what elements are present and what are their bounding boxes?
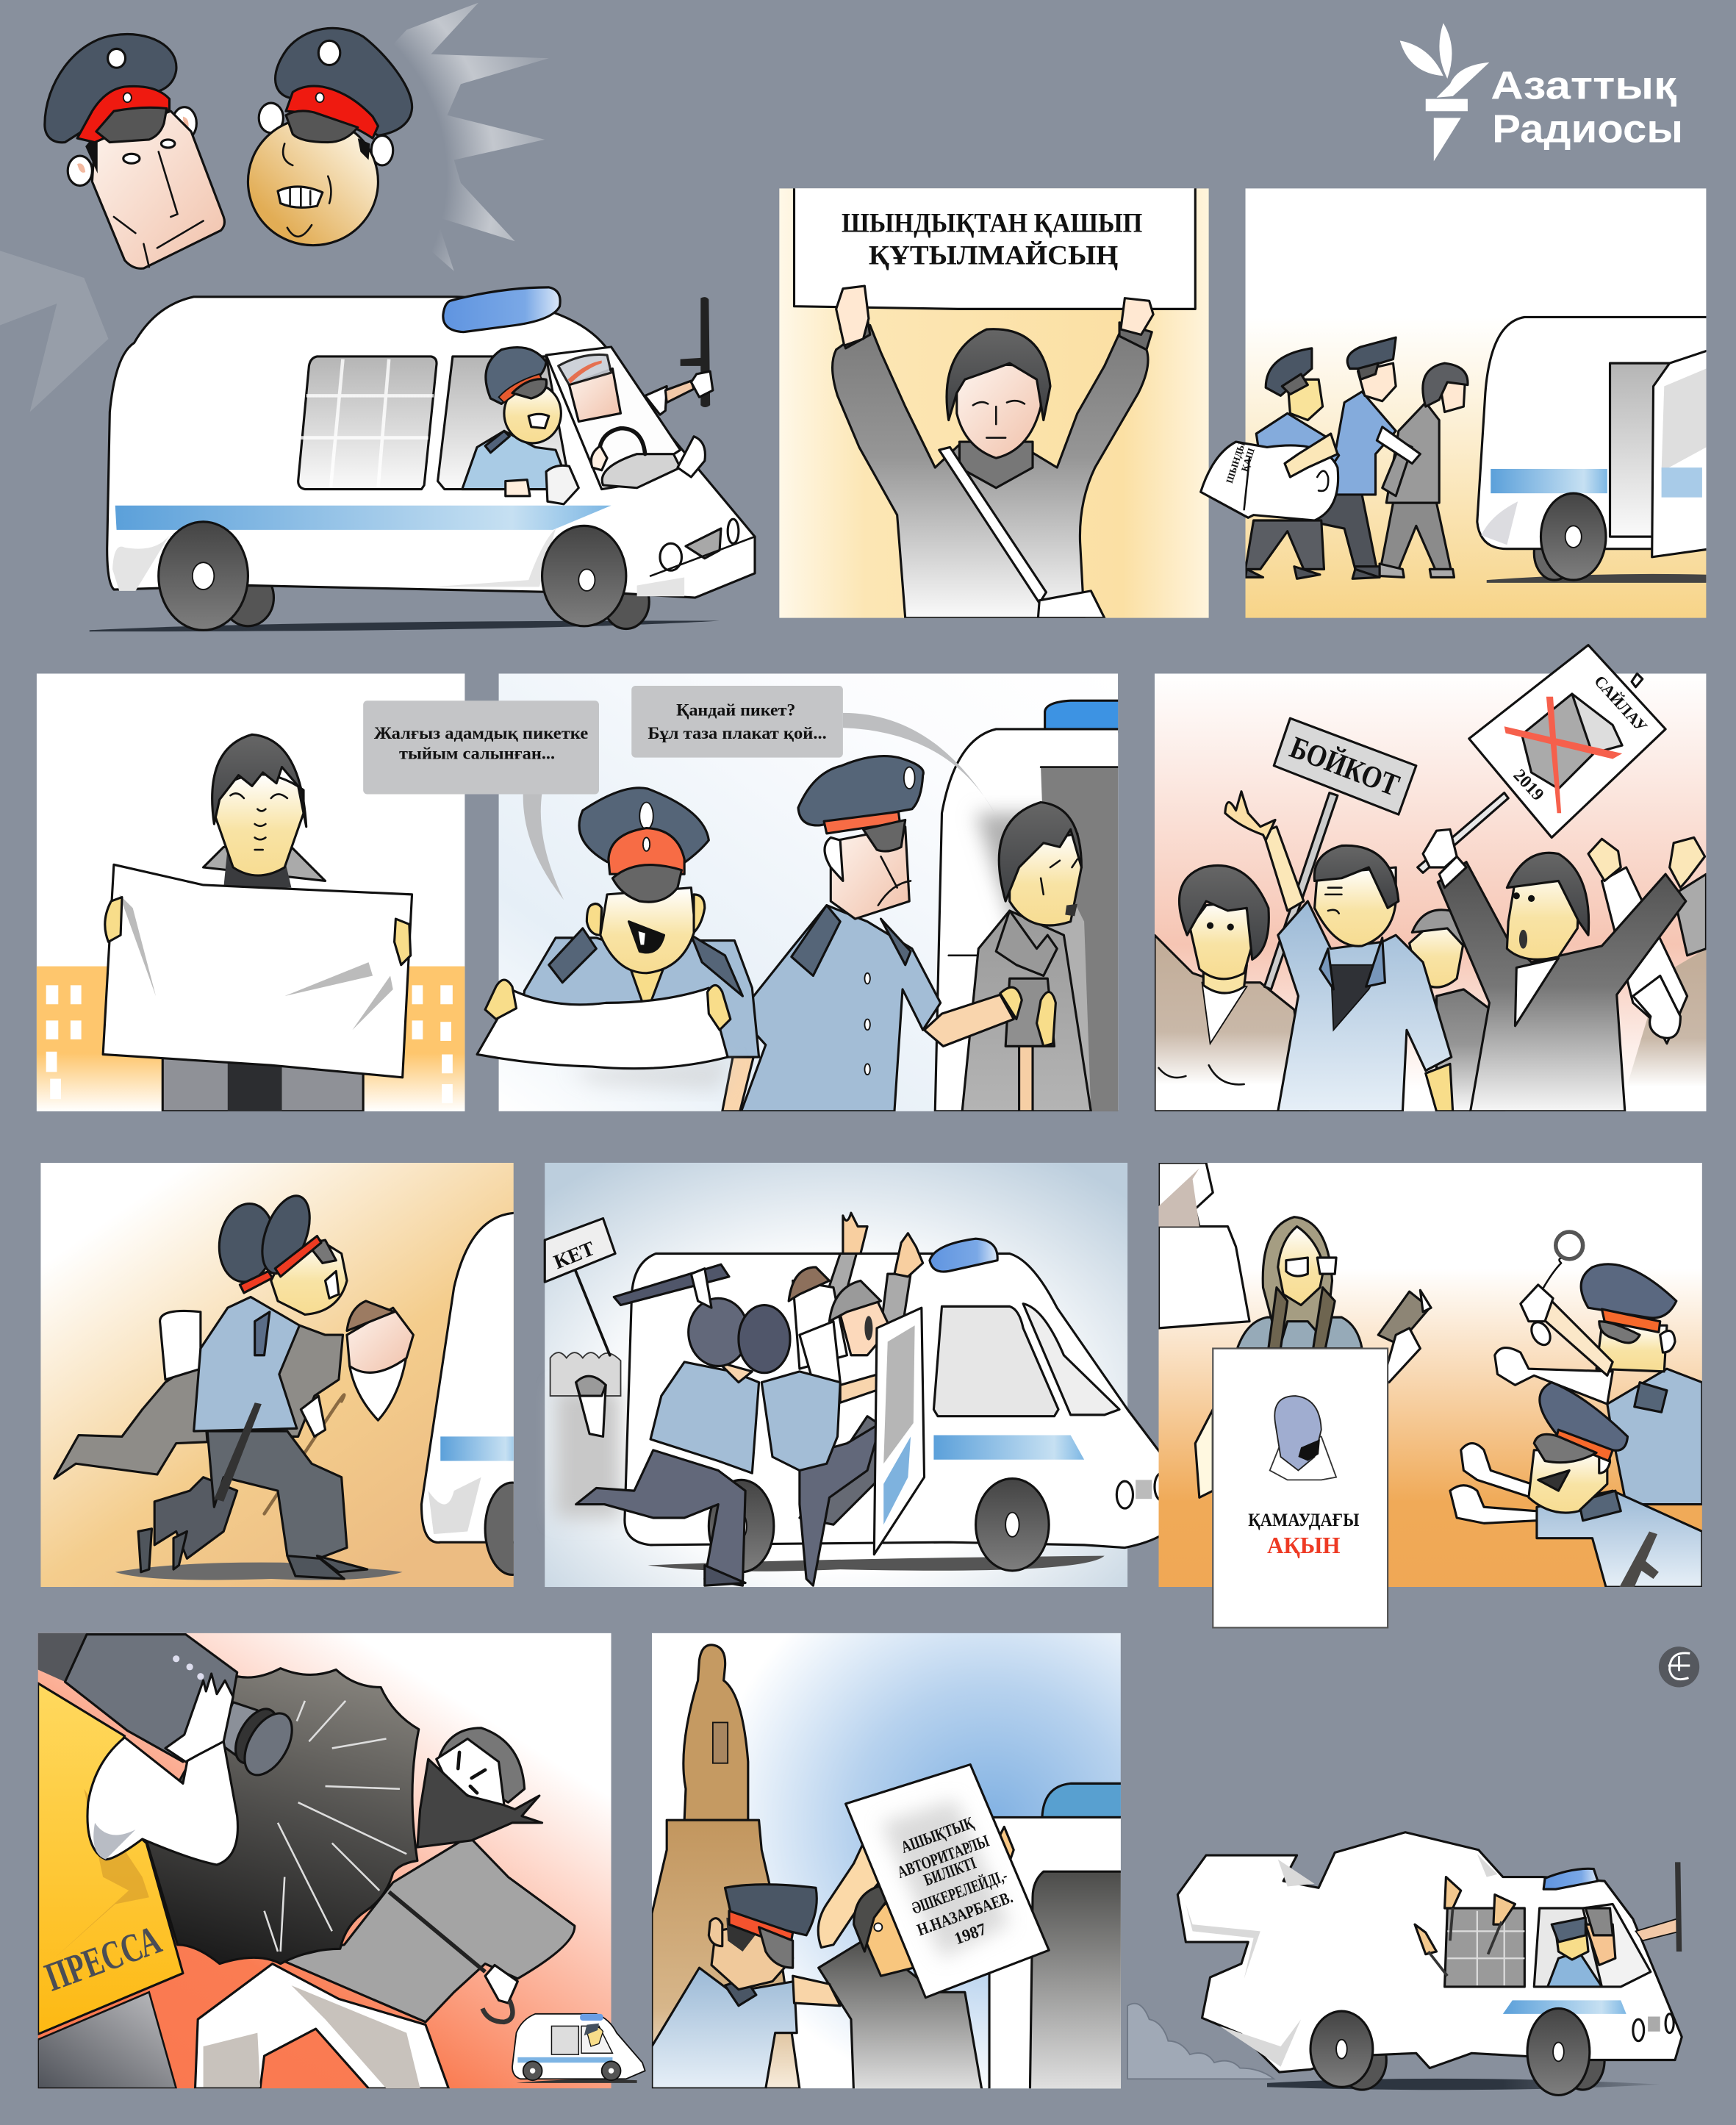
camera [38, 1633, 301, 1783]
van in side view [625, 1239, 1180, 1572]
van with open door [1477, 317, 1721, 583]
exhaust smoke [1127, 2004, 1274, 2079]
roll inscription: ШЫНДЫ [1224, 440, 1247, 484]
press label: ПРЕССА [39, 1917, 167, 2000]
panel: statue and 1987 quote [652, 1633, 1132, 2094]
tall officer [1312, 337, 1420, 577]
head: policeman with round face [248, 28, 412, 246]
round mark [1659, 1646, 1699, 1687]
officer side [652, 1885, 840, 2088]
roll inscription second line: ҚАШ [1239, 447, 1257, 473]
journalist white sleeve [87, 1674, 237, 1865]
ballot box [1522, 694, 1599, 789]
panel: detention at van [545, 1163, 1180, 1587]
man in dark coat [818, 1827, 1014, 2094]
van door [874, 1308, 925, 1555]
rolled banner [1201, 434, 1338, 520]
sign text: БОЙКОТ [1285, 730, 1404, 803]
red cross [1504, 697, 1622, 813]
sign text: top line: ШЫНДЫҚТАН ҚАШЫП [842, 207, 1142, 237]
van behind [989, 1783, 1132, 2094]
walking stick [265, 1395, 344, 1513]
placard creases [119, 895, 393, 1030]
van edge [421, 1213, 539, 1574]
panel: election boycott crowd [1155, 673, 1706, 1111]
hands on placard [105, 897, 411, 965]
bubble left text line 2: тыйым салынған... [399, 744, 555, 762]
fist and election post [1418, 793, 1508, 872]
panel: arrest near van [1246, 188, 1721, 618]
orange buildings [37, 967, 465, 1111]
logo wordmark bottom: Радиосы [1492, 108, 1683, 151]
detained man [1380, 363, 1468, 577]
panel: press camera and umbrella [38, 1633, 611, 2088]
mini police van [512, 2014, 645, 2083]
umbrella [146, 1669, 485, 1972]
book cover: poet in detention [1213, 1349, 1388, 1627]
statue and pedestal [652, 1645, 800, 2088]
speech bubble left [363, 700, 599, 900]
top officer [1495, 1232, 1702, 1505]
quote line 3: БИЛІКТІ [921, 1853, 978, 1889]
short officer [1246, 348, 1339, 569]
masked protester body [196, 1836, 575, 2088]
woman in tan top [1155, 865, 1308, 1111]
officers pushing [576, 1264, 892, 1585]
sign text: КЕТ [550, 1236, 598, 1273]
speech bubble right [631, 686, 994, 813]
officer torso [194, 1297, 326, 1502]
bubble text line 1: Қандай пикет? [676, 700, 795, 719]
panel: protester with sign overhead [779, 179, 1209, 618]
sign: boycott [1274, 718, 1416, 814]
panel: man with blank placard [37, 673, 465, 1111]
book title line 2: АҚЫН [1267, 1533, 1341, 1558]
shoulder bag and strap [939, 447, 1105, 618]
sign text: bottom line: ҚҰТЫЛМАЙСЫҢ [869, 240, 1119, 270]
siren light burst [0, 3, 549, 412]
bubble right text line 2: Бұл таза плакат қой... [648, 723, 827, 742]
man in blue shirt [1278, 845, 1453, 1111]
logo: Azattyq Radiosy [1400, 23, 1676, 161]
sign label year: 2019 [1510, 766, 1547, 805]
shoes of group [1246, 567, 1380, 578]
panel: officers confiscate blank placard [499, 673, 1125, 1111]
book title line 1: ҚАМАУДАҒЫ [1248, 1511, 1359, 1530]
sign label top: САЙЛАУ [1590, 672, 1651, 736]
quote line 2: АВТОРИТАРЛЫ [894, 1831, 991, 1882]
monument pedestal [1159, 1163, 1249, 1328]
paper with quote [846, 1765, 1049, 1998]
officers legs [138, 1431, 367, 1579]
officer faces and caps [215, 1189, 347, 1314]
logo wordmark top: Азаттық [1491, 65, 1676, 108]
quote line 4: ӘШКЕРЕЛЕЙДІ,- [909, 1866, 1010, 1918]
woman poet [1195, 1217, 1431, 1497]
protester head [947, 329, 1050, 488]
protester coat and arms [833, 317, 1152, 618]
poet portrait [1270, 1396, 1336, 1480]
sign held overhead [795, 179, 1195, 309]
yellow press vest [38, 1683, 183, 2034]
quote shadow [881, 1799, 1010, 1958]
man with grey shirt [962, 803, 1091, 1111]
crowd in distance [550, 1352, 620, 1518]
boycott post and raised arm [1225, 792, 1338, 989]
panel: officers carry old man [40, 1163, 539, 1587]
ground shadow [115, 1563, 403, 1580]
head: policeman with long face [45, 35, 224, 268]
quote line 5: Н.НАЗАРБАЕВ. [914, 1887, 1015, 1939]
protester head and mask [417, 1728, 542, 1847]
van background [935, 700, 1125, 1111]
van shaped like Kazakhstan map [1127, 1832, 1682, 2095]
bubble text line 1: Жалғыз адамдық пикетке [374, 723, 588, 742]
bottom officer [1450, 1383, 1702, 1587]
blank banner held by officer [477, 980, 732, 1091]
grey haired man [1410, 910, 1504, 1111]
quote line 6: 1987 [952, 1919, 989, 1948]
protester hand and handle [482, 1965, 517, 2022]
officer fat [515, 788, 759, 1057]
people pushed into van [789, 1213, 923, 1524]
vest folds [54, 1789, 149, 1958]
panel: poet and police [1159, 1163, 1702, 1587]
sign: election 2019 crossed out [1469, 645, 1665, 837]
blank placard [103, 864, 412, 1078]
carried man [54, 1311, 342, 1479]
right background figures [1588, 837, 1706, 1111]
main police van [90, 287, 755, 631]
officer tall [722, 756, 1055, 1111]
press pants [38, 1992, 176, 2088]
man standing [162, 734, 363, 1111]
raised fists [836, 286, 1153, 345]
quote line 1: АШЫҚТЫҚ [898, 1813, 976, 1857]
old man head [347, 1301, 413, 1420]
man in dark suit [1438, 853, 1686, 1111]
ket sign [545, 1219, 615, 1355]
